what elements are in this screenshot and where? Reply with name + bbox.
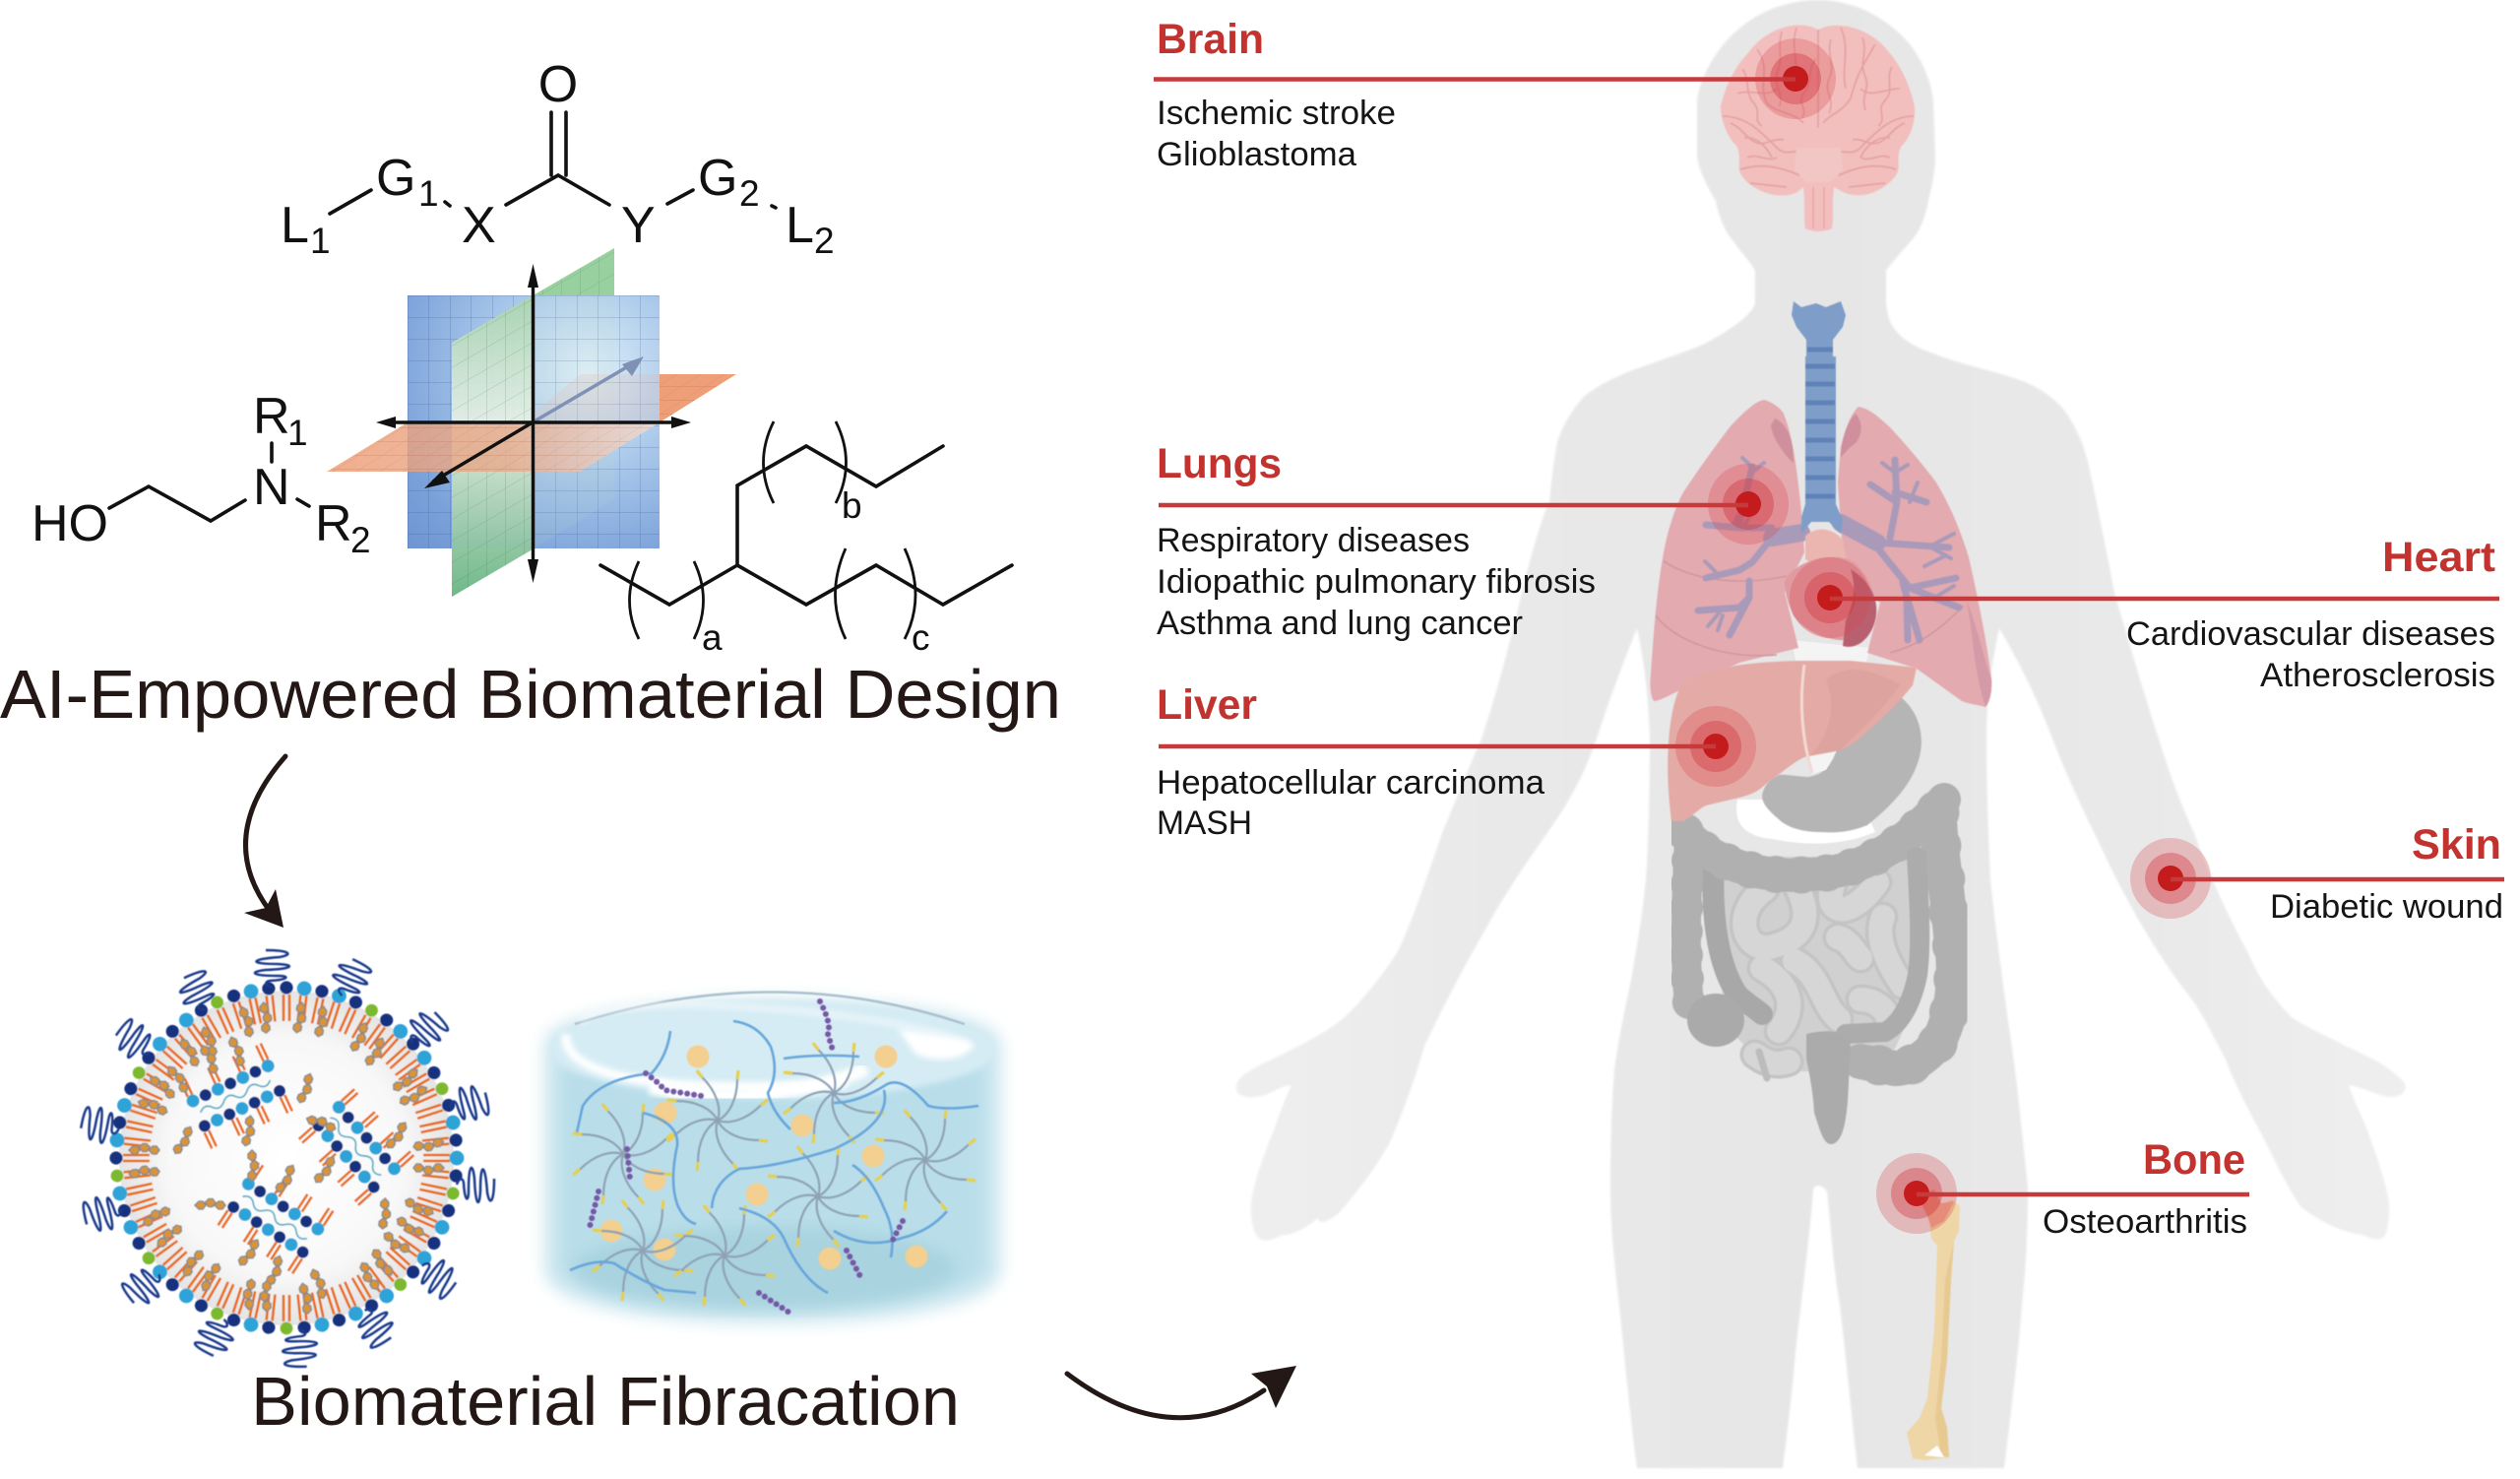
callout: Heart: Cardiovascular diseases — [2126, 615, 2495, 653]
callout: Skin — [2130, 821, 2504, 926]
encapsulated RNA micelles — [177, 1042, 416, 1275]
chemical structure: carbonyl linker template: X — [462, 197, 496, 254]
chemical structure: branched lipid tail: c — [912, 617, 929, 658]
callout: Liver: Liver — [1157, 681, 1257, 729]
callout: Bone — [1876, 1136, 2249, 1241]
bronchi — [1698, 458, 1959, 640]
fibre network — [570, 1001, 978, 1313]
heading: Biomaterial Fibracation: Biomaterial Fibracation — [251, 1363, 960, 1440]
left lung — [1650, 400, 1804, 701]
chemical structure: carbonyl linker template: O — [538, 56, 578, 113]
callout: Heart: Heart — [2382, 534, 2495, 581]
callout: Brain: Brain — [1157, 16, 1264, 63]
callout: Lungs: Asthma and lung cancer — [1157, 605, 1523, 642]
callout: Skin: Diabetic wound — [2270, 888, 2503, 926]
lung shading — [1771, 418, 1794, 463]
chemical structure: amino alcohol head — [32, 388, 371, 560]
lipid shell — [109, 981, 464, 1334]
callout: Brain: Glioblastoma — [1157, 136, 1356, 173]
chemical structure: carbonyl linker template: 1 — [310, 221, 331, 261]
gel body — [544, 993, 1001, 1323]
organ: lungs — [1650, 400, 1991, 707]
chemical structure: amino alcohol head: HO — [32, 495, 108, 552]
chemical structure: branched lipid tail — [600, 421, 1012, 658]
callout: Heart — [1790, 534, 2499, 694]
encapsulated particles — [600, 1046, 927, 1270]
callout: Brain: Ischemic stroke — [1157, 95, 1396, 132]
liposome nanoparticle — [79, 950, 494, 1368]
icon: three intersecting 3D planes with axes — [327, 248, 736, 597]
callout: Brain — [1154, 16, 1836, 173]
callout: Liver: Hepatocellular carcinoma — [1157, 764, 1544, 802]
callout: Liver: MASH — [1157, 804, 1252, 842]
arrow: design to fabrication — [244, 756, 285, 928]
chemical structure: carbonyl linker template — [281, 56, 835, 261]
chemical structure: carbonyl linker template: 2 — [739, 173, 760, 214]
right lung — [1838, 407, 1991, 707]
organ: brain — [1721, 26, 1915, 231]
callout: Lungs: Idiopathic pulmonary fibrosis — [1157, 563, 1596, 601]
drug molecules — [129, 1001, 445, 1315]
chemical structure: carbonyl linker template: G — [376, 150, 415, 207]
chemical structure: carbonyl linker template: Y — [621, 197, 656, 254]
chemical structure: branched lipid tail: a — [702, 617, 723, 658]
callout: Bone: Osteoarthritis — [2043, 1203, 2247, 1241]
chemical structure: amino alcohol head: N — [253, 459, 290, 516]
chemical structure: carbonyl linker template: G — [698, 150, 737, 207]
callout: Lungs: Lungs — [1157, 440, 1282, 487]
small intestine — [1721, 857, 1920, 1071]
surface polymer chains — [79, 950, 494, 1368]
cavity gaps around heart and liver — [1792, 640, 1870, 774]
chemical structure: amino alcohol head: R — [315, 495, 352, 552]
callout: Skin: Skin — [2412, 821, 2501, 868]
organ: femur bone — [1907, 1190, 1960, 1460]
chemical structure: carbonyl linker template: L — [281, 197, 309, 254]
organ: stomach — [1762, 689, 1922, 832]
chemical structure: amino alcohol head: 2 — [350, 520, 371, 560]
chemical structure: carbonyl linker template: L — [786, 197, 814, 254]
hydrogel cylinder — [544, 993, 1001, 1323]
callout: Liver — [1157, 681, 1756, 842]
callout: Lungs: Respiratory diseases — [1157, 522, 1470, 559]
organ: heart — [1785, 530, 1876, 647]
callout: Heart: Atherosclerosis — [2260, 657, 2495, 694]
callout: Bone: Bone — [2143, 1136, 2245, 1184]
chemical structure: amino alcohol head: R — [253, 388, 290, 445]
chemical structure: carbonyl linker template: 2 — [814, 221, 835, 261]
large intestine — [1685, 800, 1954, 1144]
chemical structure: branched lipid tail: b — [842, 485, 862, 526]
chemical structure: carbonyl linker template: 1 — [418, 173, 439, 214]
organ: small and large intestine — [1685, 800, 1954, 1144]
abdominal cavity gap — [1736, 800, 1875, 844]
arrow: fabrication to body — [1067, 1366, 1296, 1418]
chemical structure: amino alcohol head: 1 — [287, 413, 308, 453]
title: AI-Empowered Biomaterial Design: AI-Empowered Biomaterial Design — [0, 656, 1061, 733]
callout: Lungs — [1157, 440, 1789, 642]
organ: liver — [1668, 661, 1917, 821]
organ: trachea — [1792, 301, 1846, 534]
human body silhouette — [1236, 0, 2406, 1468]
